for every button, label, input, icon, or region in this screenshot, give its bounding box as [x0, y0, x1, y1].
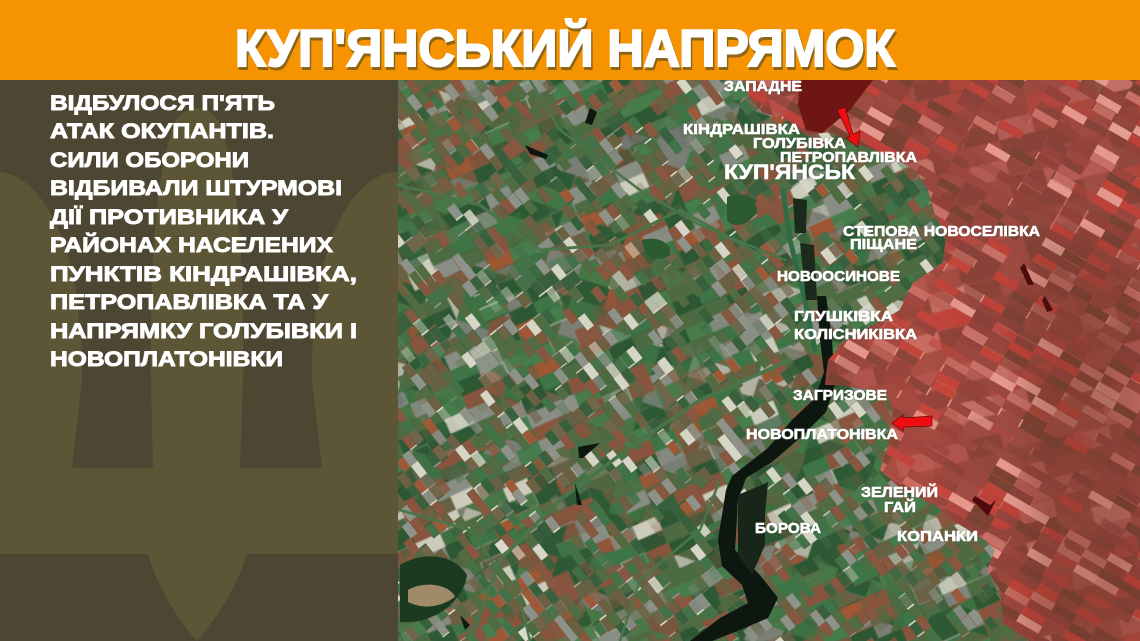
map labels: settlements: ПІЩАНЕ [850, 236, 917, 253]
text block: attack summary: НОВОПЛАТОНІВКИ [50, 348, 283, 371]
text block: attack summary: ПУНКТІВ КІНДРАШІВКА, [50, 263, 357, 286]
text block: attack summary: НАПРЯМКУ ГОЛУБІВКИ І [50, 320, 357, 343]
red-tinted occupied territory [740, 80, 1140, 641]
text block: attack summary: ПЕТРОПАВЛІВКА ТА У [50, 291, 329, 314]
icon: trident watermark [0, 108, 398, 641]
clearing in forest [408, 585, 455, 607]
text block: attack summary [50, 92, 357, 371]
arrow: east attack on Novoplatonivka [892, 415, 932, 431]
map labels: settlements: КУП'ЯНСЬК [724, 161, 855, 184]
text block: attack summary: ВІДБИВАЛИ ШТУРМОВІ [50, 177, 342, 200]
map labels: settlements: ПЕТРОПАВЛІВКА [780, 149, 917, 166]
roads and green corridors [398, 80, 815, 641]
title: КУП'ЯНСЬКИЙ НАПРЯМОК [235, 19, 895, 78]
text block: attack summary: РАЙОНАХ НАСЕЛЕНИХ [50, 233, 333, 257]
map labels: settlements: ЗЕЛЕНИЙ [861, 483, 938, 501]
arrow: north-east attack [837, 107, 860, 147]
map labels: settlements: ГОЛУБІВКА [753, 135, 846, 152]
map labels: settlements: ГЛУШКІВКА [794, 308, 893, 325]
map labels: settlements: ГАЙ [884, 498, 916, 516]
text block: attack summary: ВІДБУЛОСЯ П'ЯТЬ [50, 92, 275, 115]
map labels: settlements: КОПАНКИ [897, 528, 978, 545]
forest patches [400, 194, 757, 622]
map labels: settlements: ЗАПАДНЕ [724, 78, 802, 95]
map labels: settlements: ЗАГРИЗОВЕ [793, 387, 887, 404]
map labels: settlements: СТЕПОВА НОВОСЕЛІВКА [843, 223, 1040, 240]
text block: attack summary: АТАК ОКУПАНТІВ. [50, 120, 274, 143]
river and water bodies [460, 108, 835, 641]
map labels: settlements: НОВООСИНОВЕ [777, 268, 900, 285]
map labels: settlements: БОРОВА [755, 520, 821, 537]
map labels: settlements: КОЛІСНИКІВКА [794, 326, 917, 343]
map labels: settlements: НОВОПЛАТОНІВКА [746, 426, 898, 443]
text block: attack summary: СИЛИ ОБОРОНИ [50, 149, 249, 172]
map labels: settlements [683, 78, 1040, 545]
map: satellite image [398, 80, 1140, 641]
header bar [0, 0, 1140, 80]
panel: left olive background [0, 0, 398, 641]
map labels: settlements: КІНДРАШІВКА [683, 121, 800, 138]
text block: attack summary: ДІЇ ПРОТИВНИКА У [50, 206, 289, 229]
